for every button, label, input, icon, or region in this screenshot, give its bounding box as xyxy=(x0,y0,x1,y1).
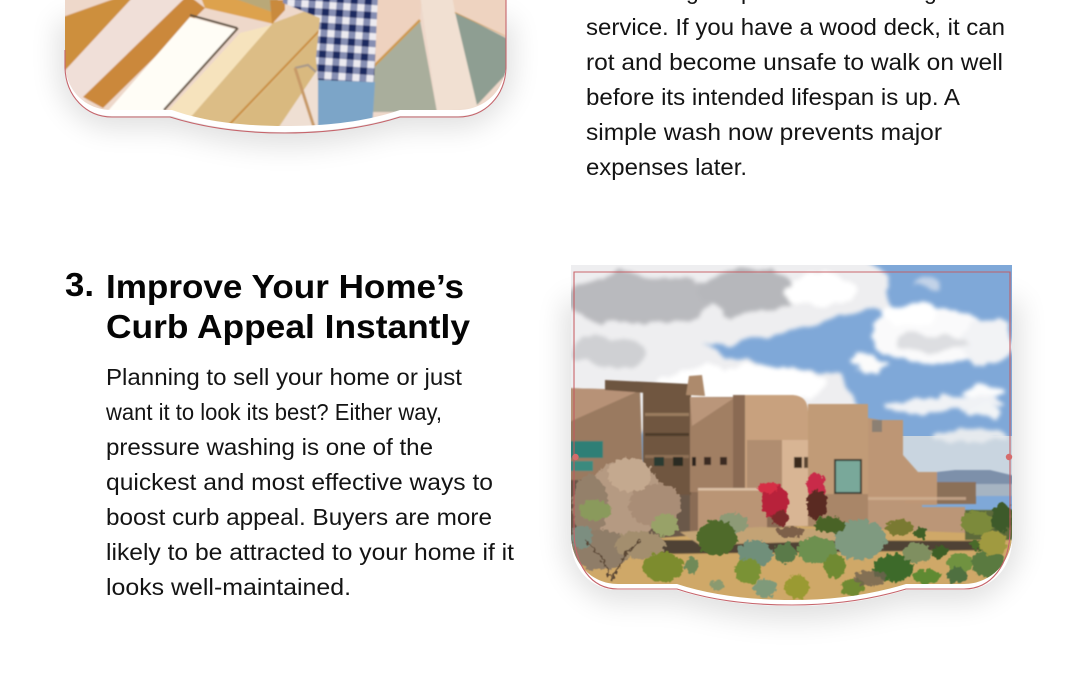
text block: item 3 body: quickest and most effective ways to xyxy=(106,469,493,495)
text block: item 2 body (continued): rot and become unsafe to walk on well xyxy=(586,49,1003,75)
text block: item 2 body (continued): simple wash now prevents major xyxy=(586,119,942,145)
text block: item 2 body (continued): before its intended lifespan is up. A xyxy=(586,84,961,110)
windows xyxy=(565,441,603,458)
text block: item 2 body (continued): expenses later. xyxy=(586,154,747,180)
distant mountains xyxy=(937,470,1015,484)
red outline xyxy=(574,530,1010,605)
heading: item 3: Curb Appeal Instantly xyxy=(106,308,471,345)
attic photo xyxy=(60,0,510,130)
card shadow xyxy=(564,300,1020,620)
house photo xyxy=(571,265,1012,600)
photo card: adobe house xyxy=(545,240,1020,620)
text block: item 3 body: likely to be attracted to your home if it xyxy=(106,539,515,565)
text block: item 2 body (continued): service. If you have a wood deck, it can xyxy=(586,14,1005,40)
dry shrub xyxy=(570,458,681,580)
red frame xyxy=(574,272,1010,530)
text block: item 3 body: looks well-maintained. xyxy=(106,574,351,600)
text block: item 3 body: Planning to sell your home or just xyxy=(106,364,463,390)
sky xyxy=(565,260,1017,550)
shrubs xyxy=(642,502,1012,599)
ground xyxy=(572,526,1012,600)
clipped previous text line xyxy=(686,0,937,4)
heading: item 3: Improve Your Home’s xyxy=(106,268,464,305)
red outline xyxy=(65,0,506,133)
photo card: attic insulation xyxy=(58,0,513,146)
building xyxy=(571,479,691,544)
white card base xyxy=(571,265,1012,606)
heading: item 3 xyxy=(106,268,471,345)
bougainvillea xyxy=(758,473,827,526)
text block: item 3 body xyxy=(105,364,515,600)
text block: item 2 body (continued) xyxy=(586,14,1005,180)
card shadow xyxy=(58,20,513,146)
frame dot right xyxy=(1006,454,1012,460)
text block: item 3 body: want it to look its best? Either way, xyxy=(105,399,442,425)
text block: item 3 body: boost curb appeal. Buyers are more xyxy=(106,504,492,530)
text block: item 3 body: pressure washing is one of the xyxy=(106,434,433,460)
number 3: 3. xyxy=(65,266,94,303)
white card base xyxy=(65,0,506,132)
lower walls xyxy=(868,504,966,534)
frame dot left xyxy=(572,454,579,460)
